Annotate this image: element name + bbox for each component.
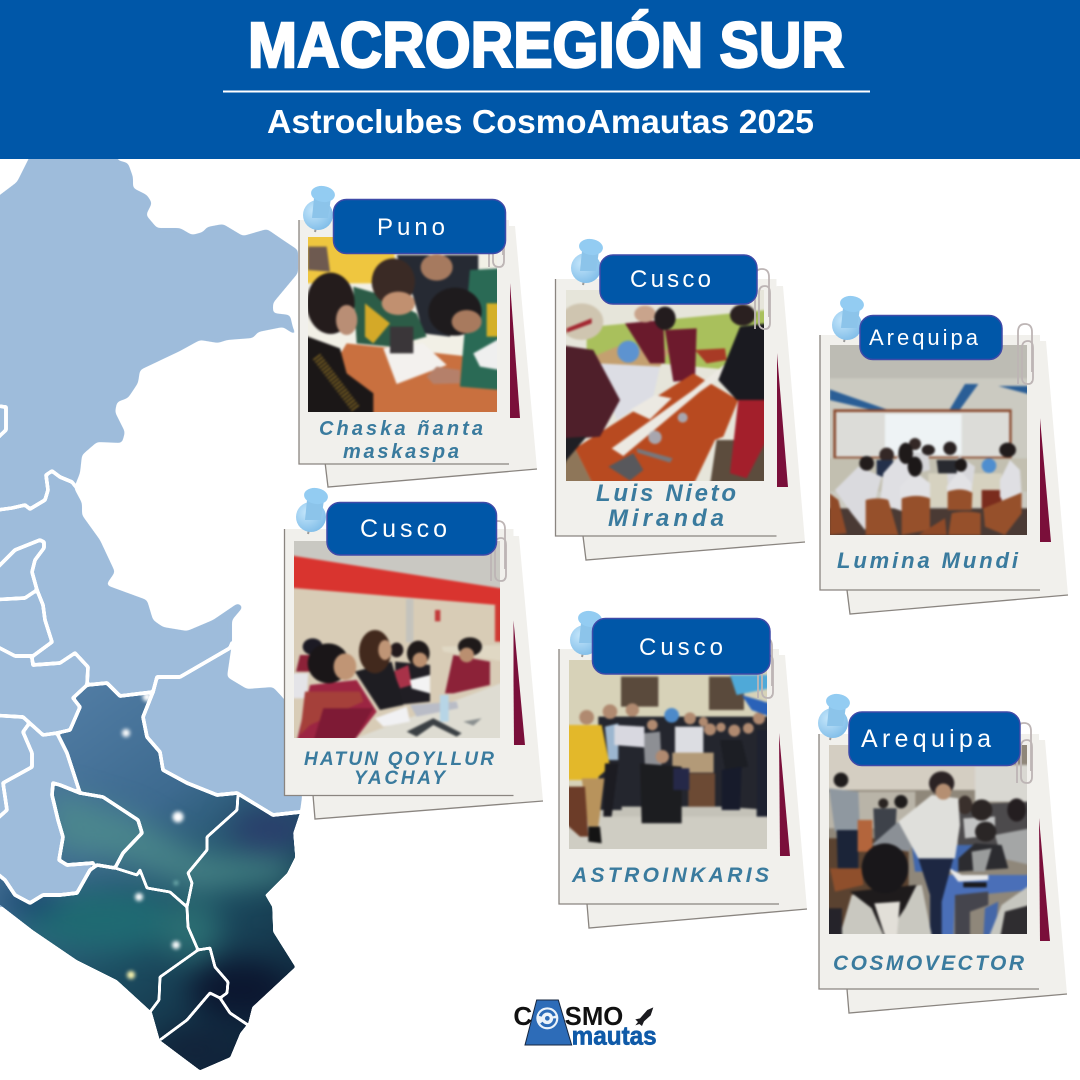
label: Cusco bbox=[592, 618, 770, 674]
label: Puno: Puno bbox=[377, 214, 445, 241]
icon: pin bbox=[832, 294, 865, 342]
icon: pin bbox=[296, 486, 329, 534]
title: MACROREGIÓN SUR bbox=[248, 9, 844, 81]
club name: HATUN QOYLLUR bbox=[304, 749, 494, 770]
club name bbox=[319, 418, 483, 463]
label: Cusco: Cusco bbox=[639, 634, 723, 661]
region borders bbox=[0, 405, 300, 903]
club name: maskaspa bbox=[343, 441, 459, 463]
card: Arequipa, Lumina Mundi bbox=[820, 294, 1068, 614]
subtitle: Astroclubes CosmoAmautas 2025 bbox=[267, 104, 814, 141]
map of southern Peru bbox=[0, 150, 310, 1075]
club name: Miranda bbox=[608, 505, 724, 532]
label: Arequipa bbox=[860, 316, 1002, 360]
club name bbox=[304, 749, 494, 789]
card: Cusco, Hatun Qoyllur Yachay bbox=[284, 486, 543, 819]
logo: CosmoAmautas: SMO bbox=[565, 1001, 623, 1031]
stars bbox=[122, 692, 184, 979]
photo bbox=[560, 287, 768, 485]
card: Arequipa, Cosmovector bbox=[818, 692, 1067, 1013]
highlighted region: nebula fill with stars bbox=[0, 680, 310, 1075]
label: Cusco bbox=[327, 502, 496, 555]
main sheet bbox=[299, 220, 509, 464]
photo bbox=[290, 537, 505, 742]
club name: Lumina Mundi bbox=[837, 548, 1019, 573]
club name: COSMOVECTOR bbox=[833, 952, 1025, 975]
back sheet bbox=[325, 226, 537, 487]
icon: rocket bbox=[635, 1007, 653, 1026]
card: Cusco, Luis Nieto Miranda bbox=[556, 237, 805, 560]
club name: YACHAY bbox=[354, 768, 447, 789]
card: Puno bbox=[299, 184, 537, 487]
logo: CosmoAmautas: C bbox=[513, 1001, 532, 1031]
label: Arequipa: Arequipa bbox=[861, 725, 991, 753]
photo bbox=[565, 657, 770, 853]
label: Puno bbox=[334, 200, 506, 254]
label: Arequipa bbox=[849, 712, 1020, 766]
paper clip bbox=[489, 207, 504, 267]
icon: pin bbox=[303, 184, 336, 232]
label: Cusco: Cusco bbox=[630, 266, 711, 293]
card: Cusco, Astroinkaris bbox=[559, 609, 807, 928]
header band bbox=[0, 0, 1080, 159]
label: Cusco: Cusco bbox=[360, 515, 447, 543]
photo bbox=[303, 233, 500, 415]
club name: Luis Nieto bbox=[596, 480, 736, 507]
label: Arequipa: Arequipa bbox=[869, 325, 979, 350]
logo: CosmoAmautas bbox=[513, 1000, 657, 1050]
icon: pin bbox=[818, 692, 851, 740]
club name: Chaska ñanta bbox=[319, 418, 483, 440]
label: Cusco bbox=[600, 255, 757, 304]
club name: ASTROINKARIS bbox=[571, 864, 769, 887]
logo: CosmoAmautas: mautas bbox=[572, 1020, 657, 1050]
photo bbox=[825, 342, 1032, 540]
icon: pin bbox=[570, 609, 603, 657]
map base: light blue regions bbox=[0, 150, 302, 910]
icon: pin bbox=[571, 237, 604, 285]
club name bbox=[596, 480, 736, 532]
photo bbox=[825, 742, 1030, 938]
